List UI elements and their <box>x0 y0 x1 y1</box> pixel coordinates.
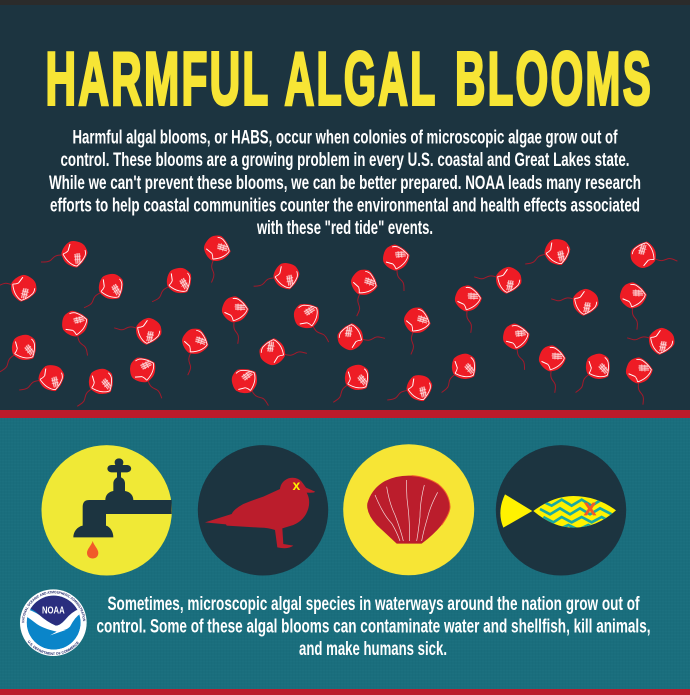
bottom caption text: and make humans sick. <box>299 638 447 660</box>
intro text block: with these "red tide" events. <box>256 217 433 239</box>
bottom red band <box>0 689 690 695</box>
bottom caption text <box>96 593 650 660</box>
poison x: X <box>584 499 596 519</box>
icon: shell <box>343 444 474 575</box>
logo wordmark: NOAA <box>42 606 65 617</box>
teal lower background <box>0 418 690 689</box>
dark upper background <box>0 0 690 410</box>
logo ring text: U.S. DEPARTMENT OF COMMERCE <box>28 640 79 655</box>
icon: fish <box>496 445 626 576</box>
title: ALGAL <box>284 36 438 120</box>
icon: seabird <box>198 445 328 576</box>
fish tail <box>500 494 532 528</box>
algae cells illustration <box>0 231 680 416</box>
shell orange rim <box>412 476 450 525</box>
faucet <box>73 458 172 537</box>
NOAA logo <box>20 589 87 656</box>
logo ring text <box>22 590 86 655</box>
shell ribs <box>375 480 438 541</box>
logo emblem <box>27 593 81 650</box>
fish zigzag scales <box>540 500 612 530</box>
shell body <box>367 476 450 544</box>
title: HARMFUL <box>46 36 270 120</box>
top dark strip <box>0 0 690 5</box>
water drop <box>87 541 98 558</box>
icon: faucet with drop <box>42 445 172 576</box>
fish body <box>533 496 616 528</box>
bird body <box>205 478 315 548</box>
intro text block <box>49 126 641 239</box>
logo ring text: NATIONAL OCEANIC AND ATMOSPHERIC ADMINISTRATION <box>22 590 86 622</box>
dead eye x: x <box>292 477 300 493</box>
red divider band <box>0 410 690 418</box>
title <box>46 36 653 120</box>
